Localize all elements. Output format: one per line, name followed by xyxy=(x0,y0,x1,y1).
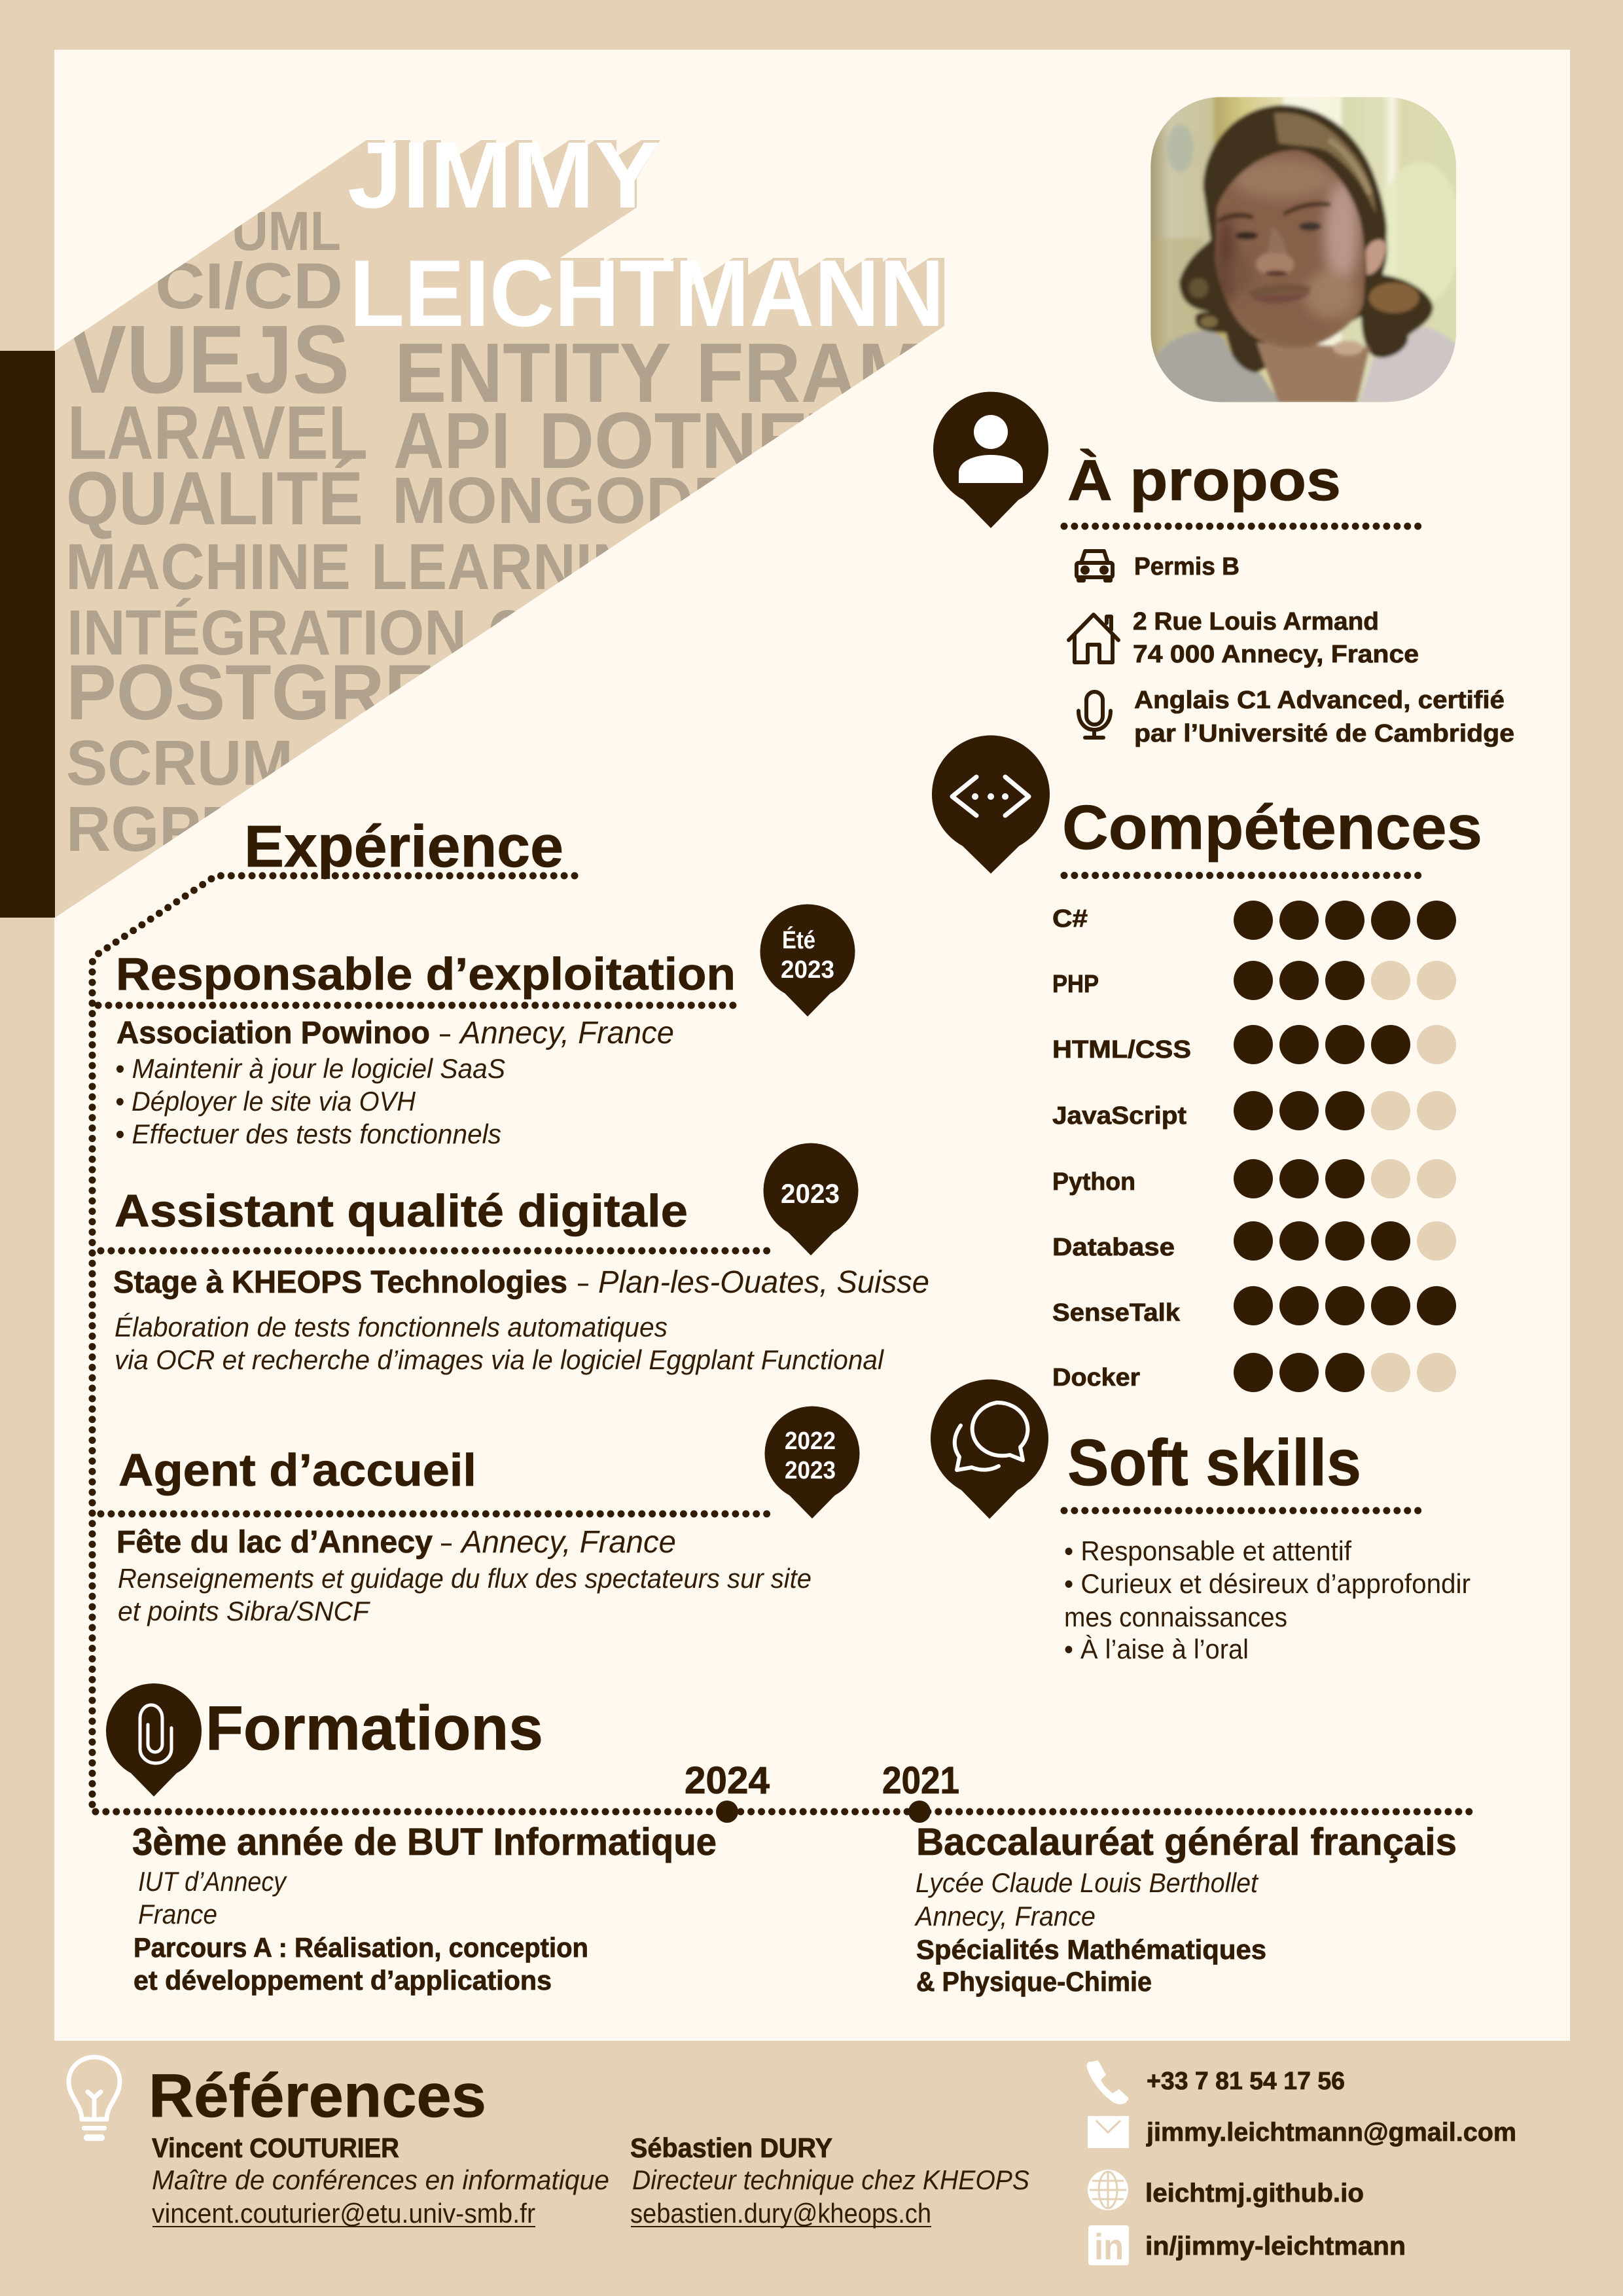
text: employer: – xyxy=(440,1016,450,1050)
skill: Database: Database xyxy=(1052,1234,1175,1261)
education: Baccalauréat: & Physique-Chimie xyxy=(916,1966,1152,1997)
keyword cloud xyxy=(68,212,918,852)
job: Agent d'accueil xyxy=(101,1407,860,1626)
education: BUT Informatique: Parcours A : Réalisation, conception xyxy=(134,1932,588,1963)
keyword cloud: CONTINUE xyxy=(488,597,763,668)
icon: phone xyxy=(1087,2060,1129,2104)
text: language: par l’Université de Cambridge xyxy=(1134,720,1514,747)
text: employer xyxy=(116,1016,674,1050)
text: employer: Plan-les-Ouates, Suisse xyxy=(598,1265,929,1300)
text: employer: Stage à KHEOPS Technologies xyxy=(113,1265,567,1300)
icon: paperclip pin xyxy=(106,1683,202,1797)
education: Baccalauréat xyxy=(914,1821,1457,1997)
text: tasks: • Déployer le site via OVH xyxy=(115,1086,416,1117)
text: tasks xyxy=(115,1053,505,1149)
timeline marker: 2024: 2024 xyxy=(685,1759,770,1802)
icon: globe xyxy=(1088,2170,1128,2210)
text: employer: Association Powinoo xyxy=(116,1016,430,1050)
skill: SenseTalk: SenseTalk xyxy=(1052,1299,1181,1327)
pin: date 2022 2023: 2022 xyxy=(785,1427,836,1455)
text: driving licence: Permis B xyxy=(1134,553,1240,581)
timeline marker: 2021: 2021 xyxy=(882,1759,959,1802)
keyword cloud: INTÉGRATION xyxy=(67,597,467,668)
text: soft skills list: • À l’aise à l’oral xyxy=(1064,1634,1249,1664)
education: BUT Informatique: 3ème année de BUT Informatique xyxy=(132,1821,717,1863)
title: name: JIMMY xyxy=(348,122,660,228)
text: employer: – xyxy=(578,1265,588,1300)
education: BUT Informatique: France xyxy=(138,1899,217,1929)
icon: speech bubbles pin xyxy=(931,1380,1048,1519)
pin: date 2023: 2023 xyxy=(781,1178,840,1209)
icon: car xyxy=(1077,551,1113,581)
keyword cloud: FRAMEWORK xyxy=(696,326,1226,420)
contact: phone xyxy=(1087,2060,1345,2104)
contact: email: jimmy.leichtmann@gmail.com xyxy=(1146,2118,1516,2147)
education: Baccalauréat: Annecy, France xyxy=(914,1901,1096,1931)
job: Responsable d'exploitation xyxy=(98,905,855,1149)
heading: Compétences: Compétences xyxy=(1062,793,1482,863)
text: description: Élaboration de tests fonctionnels automatiques xyxy=(115,1312,668,1342)
skill: C# xyxy=(1052,901,1456,940)
pin: date 2022 2023: 2023 xyxy=(785,1457,836,1484)
contact: linkedin: in/jimmy-leichtmann xyxy=(1145,2232,1406,2261)
education: BUT Informatique: IUT d’Annecy xyxy=(138,1866,288,1897)
text: soft skills list: mes connaissances xyxy=(1064,1602,1287,1632)
reference: Sébastien Dury: Directeur technique chez KHEOPS xyxy=(632,2164,1029,2195)
skill: SenseTalk xyxy=(1052,1286,1456,1327)
keyword cloud: QUALITÉ xyxy=(66,457,363,541)
text: description: Renseignements et guidage du flux des spectateurs sur site xyxy=(118,1563,812,1594)
text: employer: Annecy, France xyxy=(459,1525,676,1560)
skill: Docker xyxy=(1052,1353,1456,1392)
text: address xyxy=(1133,608,1419,668)
pin: date Été 2023: 2023 xyxy=(781,956,834,984)
keyword cloud: POSTGRESQL xyxy=(66,649,590,736)
pin: date 2022 2023 xyxy=(764,1407,860,1518)
keyword cloud: ENTITY xyxy=(395,326,671,420)
contact: website: leichtmj.github.io xyxy=(1145,2179,1364,2208)
text: soft skills list xyxy=(1064,1535,1471,1664)
keyword cloud: MACHINE xyxy=(65,530,351,603)
timeline dotted path xyxy=(92,876,1478,1812)
text: employer: Fête du lac d’Annecy xyxy=(116,1525,433,1560)
section: À propos xyxy=(933,392,1514,747)
title: name: LEICHTMANN xyxy=(349,240,944,346)
keyword cloud: UML xyxy=(232,200,341,262)
icon: light bulb xyxy=(69,2057,120,2141)
education: Baccalauréat: Baccalauréat général français xyxy=(916,1821,1457,1863)
heading: Soft skills: Soft skills xyxy=(1067,1426,1361,1499)
keyword cloud: VUEJS xyxy=(69,306,349,414)
skill: JavaScript: JavaScript xyxy=(1052,1102,1186,1130)
reference: Vincent Couturier: Maître de conférences en informatique xyxy=(152,2164,609,2195)
skill: Python xyxy=(1052,1159,1456,1198)
skill: Docker: Docker xyxy=(1052,1364,1140,1391)
icon: person pin xyxy=(933,392,1048,528)
text: soft skills list: • Responsable et attentif xyxy=(1064,1535,1351,1566)
reference: Vincent Couturier: Vincent COUTURIER xyxy=(152,2132,399,2163)
text: address: 2 Rue Louis Armand xyxy=(1133,608,1379,636)
text: address: 74 000 Annecy, France xyxy=(1133,641,1419,668)
keyword cloud: RGPD xyxy=(66,793,245,865)
icon: envelope xyxy=(1088,2116,1129,2148)
education: BUT Informatique: et développement d’applications xyxy=(134,1965,552,1996)
reference: Vincent Couturier xyxy=(152,2132,609,2229)
keyword cloud: SCRUM xyxy=(66,727,293,798)
keyword cloud: LEARNING xyxy=(371,530,681,603)
heading: Formations: Formations xyxy=(205,1693,543,1763)
skill: PHP: PHP xyxy=(1052,971,1099,998)
reference: Vincent Couturier: vincent.couturier@etu.univ-smb.fr xyxy=(152,2198,535,2229)
timeline marker: 2021 xyxy=(882,1759,959,1823)
contact: phone: +33 7 81 54 17 56 xyxy=(1147,2068,1345,2095)
heading: job title: Responsable d’exploitation xyxy=(116,948,736,999)
portrait photo xyxy=(1150,97,1456,402)
text: tasks: • Effectuer des tests fonctionnels xyxy=(115,1119,501,1149)
contact: website xyxy=(1088,2170,1364,2210)
skill: Database xyxy=(1052,1221,1456,1261)
reference: Sébastien Dury: Sébastien DURY xyxy=(630,2132,832,2163)
text: description: et points Sibra/SNCF xyxy=(118,1596,370,1626)
section: Compétences xyxy=(932,736,1482,1392)
contact: linkedin xyxy=(1088,2225,1406,2267)
skill: HTML/CSS xyxy=(1052,1025,1456,1064)
heading: Références: Références xyxy=(149,2061,486,2130)
text: employer: Annecy, France xyxy=(458,1016,674,1050)
education: BUT Informatique xyxy=(132,1821,717,1996)
icon: linkedin: in xyxy=(1094,2226,1124,2267)
pin: date 2023 xyxy=(763,1143,859,1255)
text: description xyxy=(118,1563,812,1626)
heading: job title: Agent d’accueil xyxy=(118,1444,476,1496)
keyword cloud: API xyxy=(393,396,510,485)
skill: HTML/CSS: HTML/CSS xyxy=(1052,1036,1191,1064)
text: language: Anglais C1 Advanced, certifié xyxy=(1134,687,1505,714)
timeline marker: 2024 xyxy=(685,1759,770,1823)
diagonal long-shadow shape xyxy=(55,140,944,918)
pin: date Été 2023: Été xyxy=(782,925,815,954)
title: name xyxy=(348,122,944,346)
reference: Sébastien Dury: sebastien.dury@kheops.ch xyxy=(630,2198,931,2229)
text: employer xyxy=(113,1265,929,1300)
text: soft skills list: • Curieux et désireux d’approfondir xyxy=(1064,1568,1471,1599)
text: language xyxy=(1134,687,1514,747)
heading: Expérience: Expérience xyxy=(244,814,563,880)
icon: microphone xyxy=(1079,692,1111,738)
education: Baccalauréat: Spécialités Mathématiques xyxy=(916,1934,1266,1965)
heading: À propos: À propos xyxy=(1067,448,1341,512)
text: employer xyxy=(116,1525,676,1560)
skill: PHP xyxy=(1052,961,1456,1000)
text: tasks: • Maintenir à jour le logiciel SaaS xyxy=(115,1053,505,1084)
skill: Python: Python xyxy=(1052,1168,1135,1196)
section: Références xyxy=(69,2057,1029,2229)
heading: job title: Assistant qualité digitale xyxy=(115,1185,688,1236)
skill: JavaScript xyxy=(1052,1091,1456,1130)
reference: Sébastien Dury xyxy=(630,2132,1029,2229)
skill: C#: C# xyxy=(1052,905,1088,933)
education: Baccalauréat: Lycée Claude Louis Berthollet xyxy=(916,1867,1259,1898)
job: Assistant qualité digitale xyxy=(101,1143,929,1375)
icon: house xyxy=(1069,615,1118,662)
section: Formations xyxy=(106,1683,1457,1997)
section: Soft skills xyxy=(931,1380,1471,1664)
text: employer: – xyxy=(441,1525,452,1560)
text: description: via OCR et recherche d’images via le logiciel Eggplant Functional xyxy=(115,1344,885,1375)
keyword cloud: LARAVEL xyxy=(67,390,368,475)
dark side bar xyxy=(0,351,55,918)
text: description xyxy=(115,1312,885,1375)
keyword cloud: CI/CD xyxy=(155,249,343,322)
keyword cloud: DOTNET xyxy=(539,396,855,485)
pin: date Été 2023 xyxy=(760,905,855,1016)
icon: code pin xyxy=(932,736,1050,874)
keyword cloud: MONGODB xyxy=(392,464,740,537)
